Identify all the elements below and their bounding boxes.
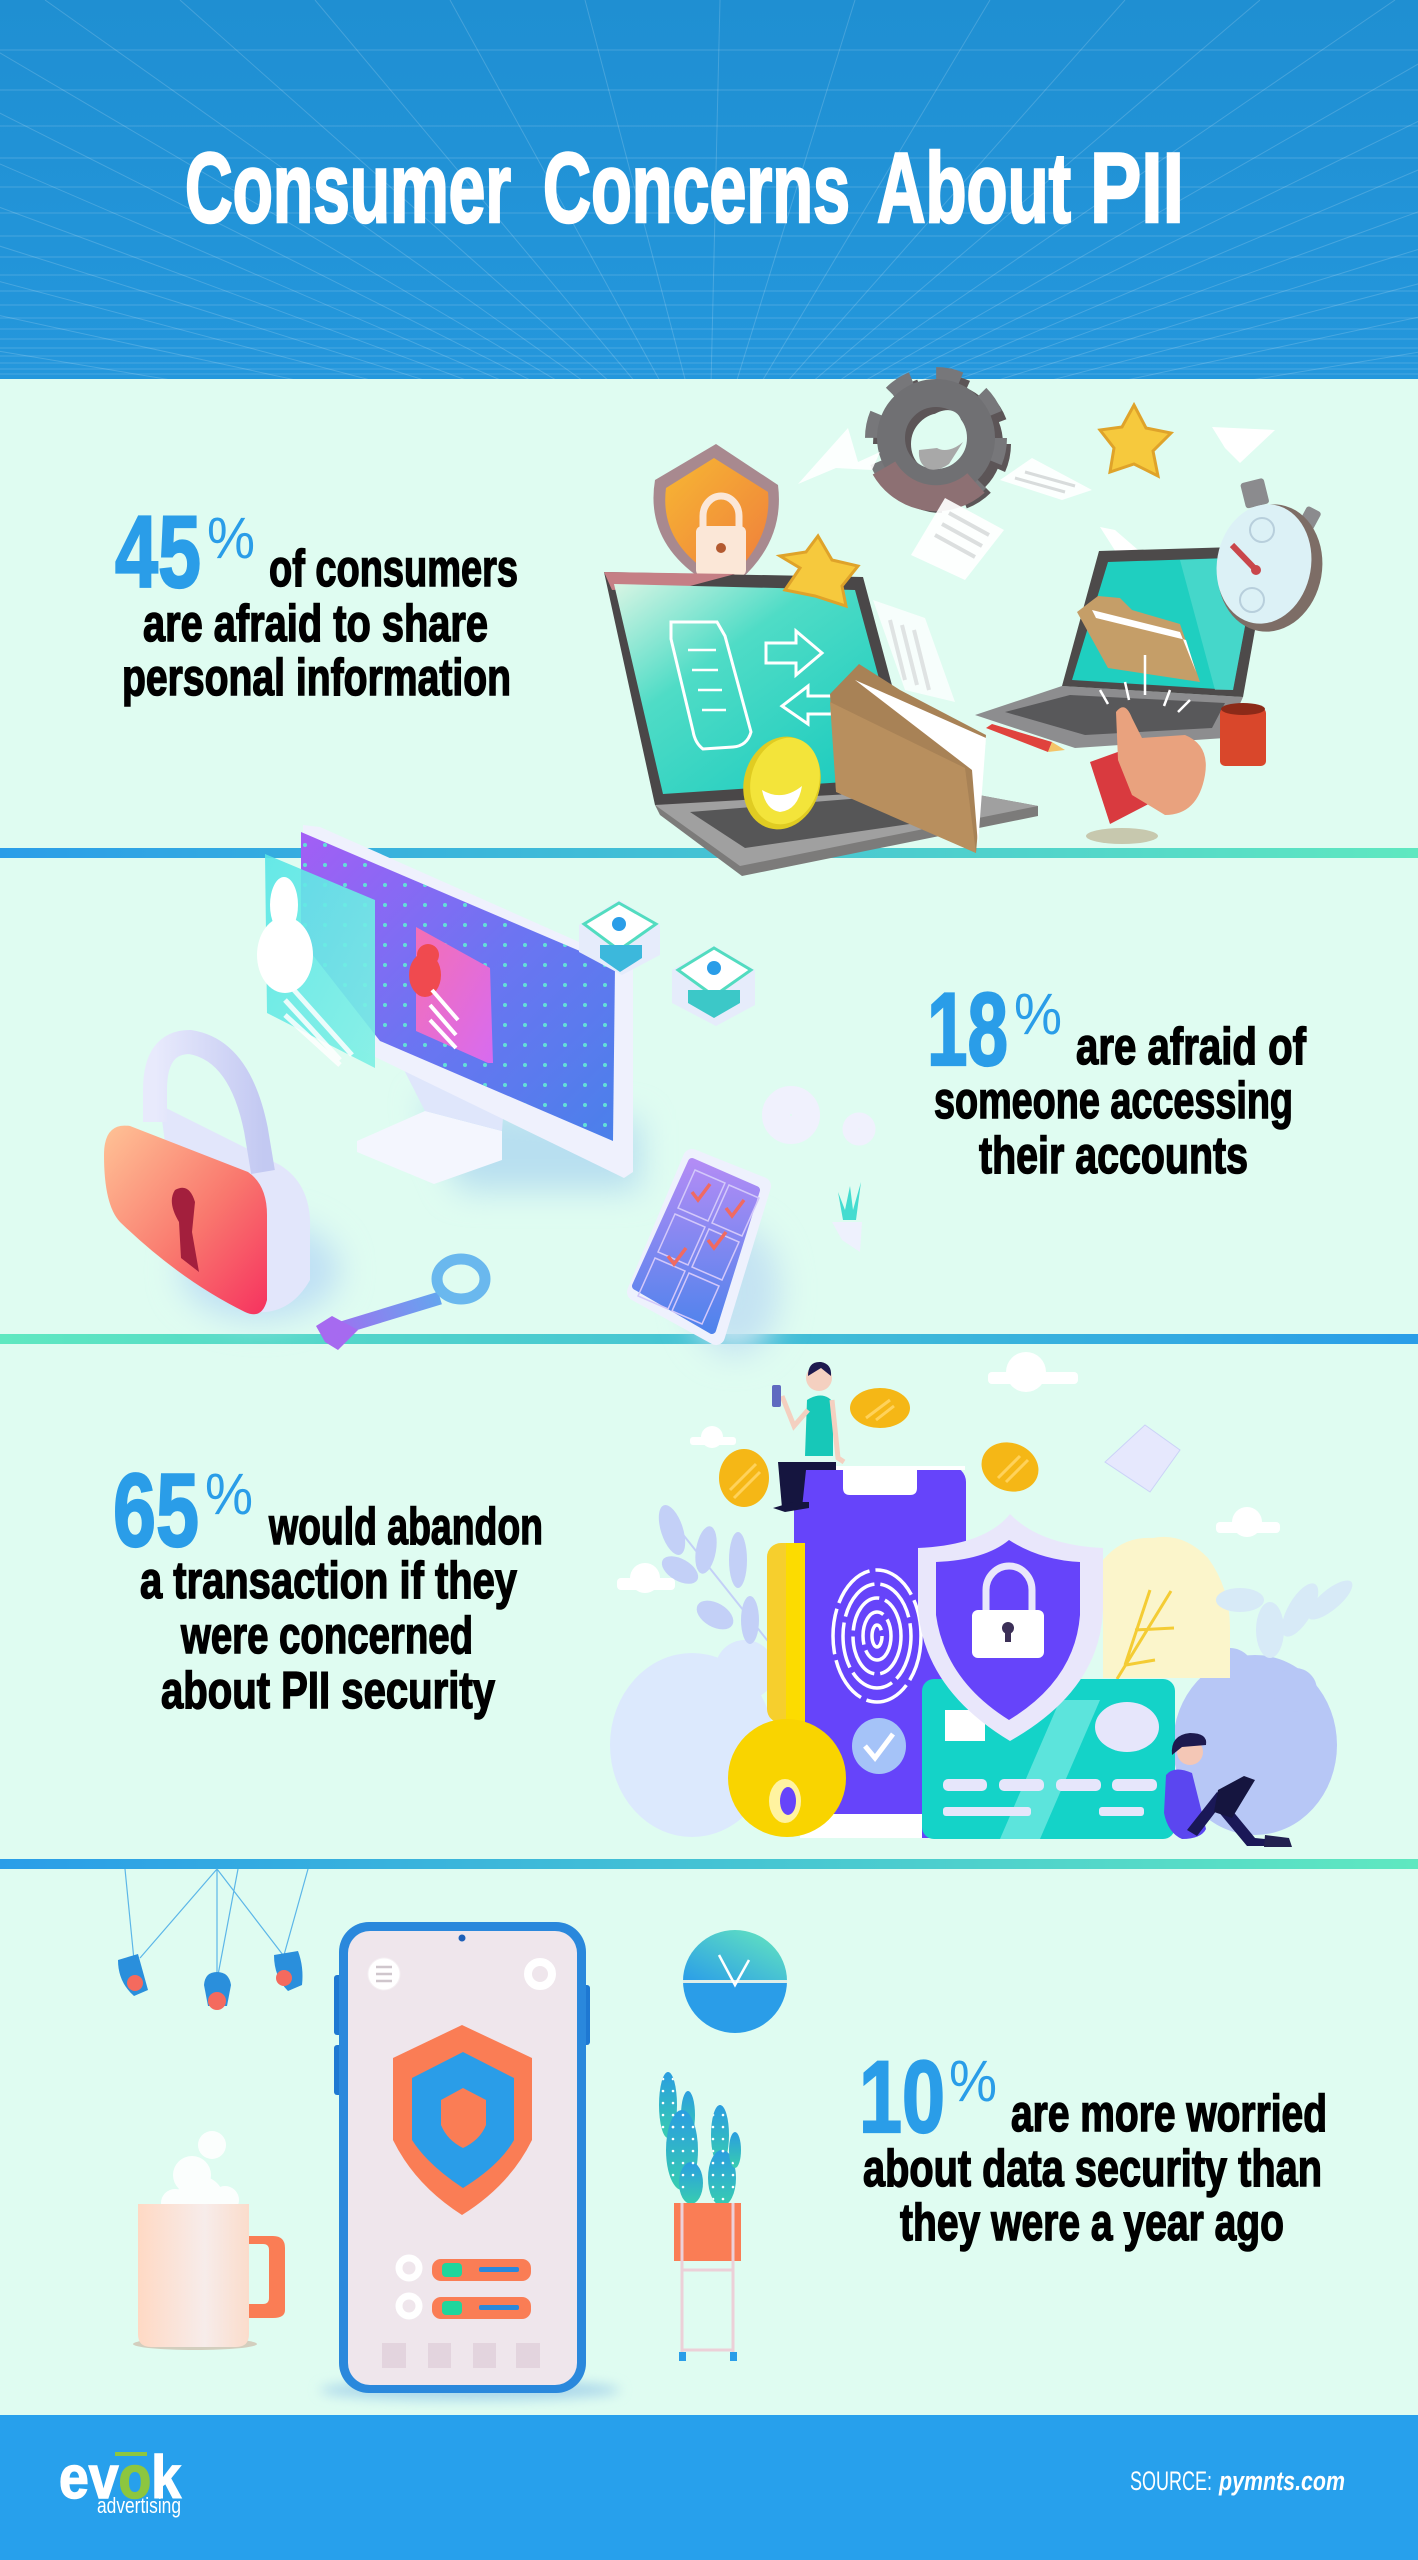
icons: gears — [777, 1101, 867, 1137]
icon: phone with fingerprint — [794, 1466, 966, 1838]
person sitting with laptop — [1164, 1733, 1292, 1847]
icon: padlock — [104, 1042, 340, 1320]
stat text: 10%: % — [949, 2049, 997, 2114]
dock squares — [382, 2343, 540, 2368]
stat text: 65%: would abandon — [268, 1498, 543, 1556]
floating cyan profile card — [257, 854, 375, 1068]
stat text: 18% — [927, 972, 1307, 1185]
title: Concerns — [543, 132, 850, 243]
icon: stopwatch — [1207, 478, 1332, 640]
key rays — [1100, 655, 1190, 712]
stat text: 45% — [115, 495, 518, 707]
foliage and clouds — [610, 1352, 1358, 1837]
stat text: 65%: about PII security — [161, 1662, 495, 1720]
icon: phone with checklist — [636, 1158, 780, 1355]
icon: star right — [1100, 405, 1171, 476]
stat text: 65%: a transaction if they — [140, 1552, 517, 1610]
stat text: 65%: % — [205, 1462, 253, 1527]
icon: smiley coin — [733, 727, 831, 839]
header banner — [0, 0, 1418, 379]
icons: coins — [719, 1388, 1045, 1507]
hanging lamps — [118, 1869, 308, 2010]
panel: 10 percent more worried — [118, 1869, 1327, 2400]
icon: paper document — [1105, 1425, 1180, 1492]
icon: mug with steam — [133, 2131, 285, 2350]
icon: key — [316, 1259, 485, 1350]
check badge — [852, 1718, 906, 1774]
stat text: 45%: 45 — [115, 495, 201, 609]
fingerprint — [833, 1570, 921, 1702]
pink profile card — [409, 927, 493, 1063]
logo: evok advertising: evok — [59, 2444, 182, 2511]
source credit — [1130, 2466, 1345, 2496]
stat text: 10% — [859, 2040, 1327, 2252]
icon: small plant — [832, 1182, 862, 1252]
icon: small laptop — [975, 546, 1270, 748]
icon: paper plane left — [798, 428, 880, 484]
icon: gear — [874, 376, 1002, 504]
stat text: 18%: their accounts — [979, 1127, 1248, 1185]
stat text: 45%: % — [207, 506, 255, 571]
panel: 18 percent accounts accessed — [104, 825, 1307, 1355]
panel: 65 percent would abandon transaction — [113, 1352, 1358, 1847]
stat text: 18%: are afraid of — [1076, 1018, 1307, 1076]
panel: 45 percent afraid to share — [115, 376, 1332, 876]
icon: paper plane right — [1212, 427, 1275, 463]
stat text: 65%: 65 — [113, 1453, 199, 1569]
settings rows — [399, 2258, 531, 2319]
divider bars — [0, 848, 1418, 1869]
icon: main laptop — [604, 572, 1038, 876]
illustration: phone with shield, lamps, mug, cactus, clock — [118, 1869, 787, 2400]
icon: cube two — [672, 946, 755, 1026]
icon: cube one — [579, 900, 660, 975]
stat text: 65% — [113, 1453, 543, 1720]
icon: golden key — [728, 1543, 846, 1837]
logo: evok advertising: advertising — [97, 2493, 181, 2518]
icon: star on laptop — [780, 536, 858, 606]
stat text: 10%: 10 — [859, 2040, 945, 2154]
illustration: phone, shield, key, credit card — [610, 1352, 1358, 1847]
icon: shield with lock — [653, 444, 779, 580]
icon: thumbs up — [1086, 707, 1206, 844]
illustration: monitor, padlock, key, phone — [104, 825, 867, 1355]
title: Consumer — [185, 132, 511, 243]
icon: monitor — [300, 825, 640, 1190]
icon: cactus in pot — [659, 2072, 741, 2361]
icon: smartphone with shield — [320, 1922, 620, 2400]
title: PII — [1090, 132, 1184, 243]
stat text: 18%: someone accessing — [934, 1072, 1293, 1130]
stat text: 45%: personal information — [122, 649, 511, 707]
icon: credit card — [922, 1679, 1175, 1839]
icon: coffee mug — [1220, 703, 1266, 766]
stat text: 18%: 18 — [927, 972, 1008, 1088]
icon: document on screen — [671, 622, 751, 749]
source credit: SOURCE: — [1130, 2466, 1212, 2496]
stat text: 65%: were concerned — [180, 1607, 473, 1665]
person sitting on phone — [772, 1362, 844, 1512]
floating papers — [873, 458, 1168, 702]
illustration: laptops, gear, folders — [604, 376, 1332, 876]
source credit: pymnts.com — [1218, 2466, 1345, 2496]
icon: shield with lock — [918, 1514, 1103, 1741]
icon: wall clock — [683, 1930, 787, 2033]
icon: transfer arrows — [766, 631, 832, 724]
footer band — [0, 2415, 1418, 2560]
stat text: 18%: % — [1014, 982, 1062, 1047]
stat text: 10%: they were a year ago — [900, 2194, 1284, 2252]
icon: pencil — [986, 724, 1065, 752]
shield emblem — [393, 2025, 532, 2215]
title: About — [877, 132, 1071, 243]
icon: manila folder — [830, 664, 986, 853]
stat text: 45%: of consumers — [269, 540, 518, 598]
small folder — [1077, 596, 1200, 682]
title — [185, 132, 1184, 243]
stat text: 45%: are afraid to share — [143, 595, 488, 653]
